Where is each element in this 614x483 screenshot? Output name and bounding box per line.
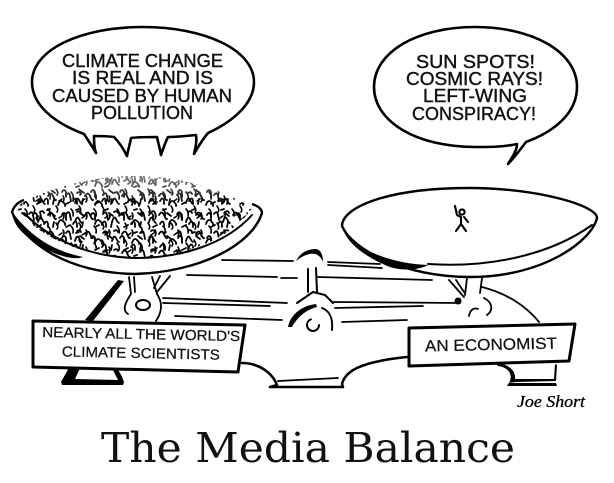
label: nearly all the world's climate scientists xyxy=(33,321,245,372)
left support xyxy=(61,276,170,385)
right foot xyxy=(494,362,557,386)
bubble text: climate change: CLIMATE CHANGE xyxy=(62,51,223,71)
speech bubble: left xyxy=(32,27,254,156)
right support xyxy=(449,278,557,386)
scale base xyxy=(242,357,407,387)
label: an economist: AN ECONOMIST xyxy=(425,335,557,355)
bubble text: sun spots: COSMIC RAYS! xyxy=(406,69,543,89)
bubble text: sun spots xyxy=(406,52,543,124)
left foot xyxy=(61,366,124,385)
bubble text: sun spots: SUN SPOTS! xyxy=(416,52,535,72)
bubble text: sun spots: LEFT-WING xyxy=(423,86,527,106)
icon: tiny economist figure xyxy=(455,206,468,231)
bubble text: climate change: CAUSED BY HUMAN xyxy=(52,86,232,106)
speech bubble: right xyxy=(374,27,577,164)
title: The Media Balance xyxy=(101,424,515,472)
label: an economist xyxy=(409,324,575,366)
crowd of scientists xyxy=(18,176,252,257)
bubble text: climate change xyxy=(52,51,232,123)
bubble text: climate change: IS REAL AND IS xyxy=(72,68,213,88)
right pan with single economist xyxy=(342,188,597,277)
scale body: beams and centre post xyxy=(163,249,460,331)
label: nearly all the world's climate scientists: CLIMATE SCIENTISTS xyxy=(62,344,220,364)
label: nearly all the world's climate scientists: NEARLY ALL THE WORLD'S xyxy=(42,325,240,345)
bubble text: climate change: POLLUTION xyxy=(91,103,193,123)
bubble text: sun spots: CONSPIRACY! xyxy=(412,104,536,124)
left pan with crowd of scientists xyxy=(10,170,262,274)
signature: Joe Short: Joe Short xyxy=(517,392,586,411)
